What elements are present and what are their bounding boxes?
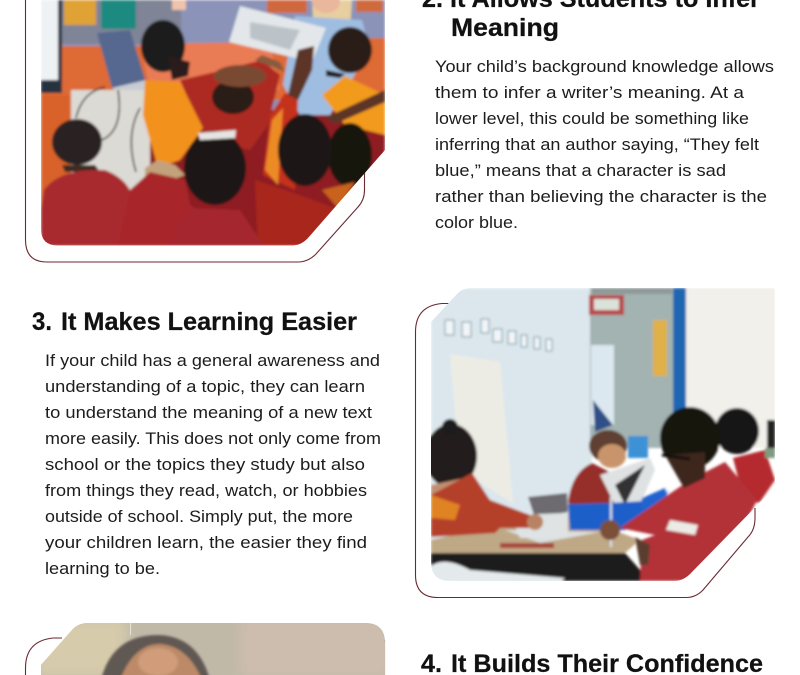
text block: point 3: learning to be.: [45, 559, 160, 578]
text block: point 2: Your child’s background knowledge allows: [435, 57, 774, 76]
outline frame: photo 1: [26, 0, 364, 262]
laptop: [97, 30, 146, 88]
photo: student portrait: [41, 623, 385, 675]
basket: [568, 490, 668, 530]
text block: point 3: understanding of a topic, they can learn: [45, 377, 365, 396]
text block: point 2: lower level, this could be something like: [435, 109, 749, 128]
chair: [528, 493, 568, 518]
background kids: [593, 400, 613, 432]
right girl: [715, 408, 759, 454]
photo: students writing at a desk: [425, 288, 775, 582]
heading: point 2: [422, 0, 760, 42]
outline frame: photo 3: [26, 638, 384, 675]
text block: point 2: [435, 57, 774, 232]
text block: point 3: to understand the meaning of a new text: [45, 403, 372, 422]
text block: point 3: your children learn, the easier they find: [45, 533, 367, 552]
left girl: [431, 424, 478, 486]
text block: point 3: more easily. This does not only come from: [45, 429, 381, 448]
lower scene base: [41, 96, 72, 210]
photo: teacher reading to students: [41, 0, 385, 246]
back child left: [52, 119, 102, 165]
text block: point 2: color blue.: [435, 213, 518, 232]
text block: point 3: outside of school. Simply put, the more: [45, 507, 353, 526]
text block: point 3: If your child has a general awareness and: [45, 351, 380, 370]
heading: point 3: It Makes Learning Easier: [61, 308, 357, 336]
back child centre jacket: [120, 171, 194, 246]
middle child: [180, 60, 280, 150]
text block: point 3: [45, 351, 381, 578]
outline frame: photo 2: [416, 304, 755, 598]
boy orange left: [141, 20, 185, 72]
heading: point 2: Meaning: [451, 14, 559, 42]
right orange boy: [328, 27, 372, 73]
front boy: [620, 462, 757, 581]
teacher: [310, 0, 354, 21]
text block: point 3: from things they read, watch, or hobbies: [45, 481, 367, 500]
text block: point 2: them to infer a writer’s meaning. At a: [435, 83, 745, 102]
text block: point 2: rather than believing the character is the: [435, 187, 767, 206]
heading: point 3: 3.: [32, 308, 52, 336]
boy dark head: [255, 180, 340, 246]
text block: point 3: school or the topics they study but also: [45, 455, 365, 474]
raised arm: [263, 93, 298, 190]
text block: point 2: inferring that an author saying, “They felt: [435, 135, 759, 154]
text block: point 2: blue,” means that a character is sad: [435, 161, 726, 180]
table: [431, 513, 640, 553]
